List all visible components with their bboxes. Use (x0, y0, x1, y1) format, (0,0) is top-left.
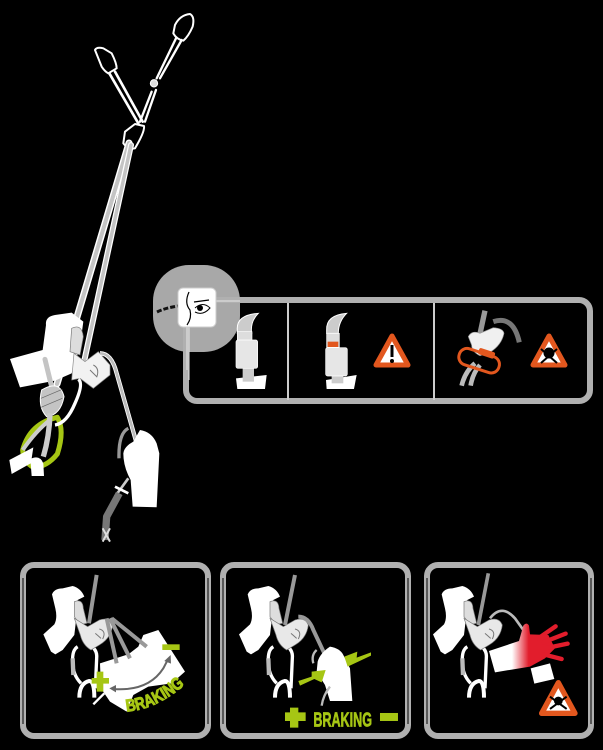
rope tail (43, 413, 50, 457)
hand positions (100, 630, 185, 712)
brake rope (100, 353, 137, 443)
icon: warning triangle (376, 336, 408, 365)
rope up (478, 311, 485, 342)
white carabiner (55, 379, 81, 425)
orange carabiner (457, 346, 502, 375)
rope strands down (462, 363, 480, 386)
divider 1 (287, 303, 289, 400)
gate sleeve (478, 348, 496, 359)
carabiner right (173, 14, 193, 41)
knot (40, 386, 64, 417)
right hand (123, 430, 159, 507)
eye icon (178, 288, 216, 327)
gripping hand (317, 647, 352, 701)
rope loop and tail (313, 650, 330, 706)
frame (186, 300, 590, 401)
green carabiner (23, 417, 61, 467)
hand cuff (531, 663, 554, 684)
climber belay scene (9, 313, 159, 542)
icon: danger triangle (533, 336, 565, 365)
rope stub (93, 693, 104, 704)
grey rope loop (119, 428, 128, 458)
ok rope sleeve (236, 313, 267, 389)
anchor: carabiners and slings (95, 14, 193, 149)
belay device (72, 352, 110, 388)
plus (92, 672, 109, 692)
icon: danger triangle (542, 683, 575, 713)
panel: braking hand motion (20, 562, 211, 739)
panel: hand position braking (223, 565, 408, 736)
label: BRAKING (313, 710, 372, 732)
plus sign (285, 708, 306, 728)
carabiner lower (123, 124, 144, 149)
sight line (157, 306, 178, 312)
worn rope sleeve (326, 313, 357, 389)
fist shading (70, 327, 83, 355)
device body (468, 328, 504, 356)
rope end (115, 478, 128, 497)
panel: braking hand motion: BRAKING (125, 677, 184, 712)
carabiner left (95, 48, 117, 73)
device and hand (433, 586, 502, 698)
arrow heads (109, 655, 171, 692)
lower arm (9, 447, 44, 476)
inspection magnifier (153, 265, 240, 352)
ropes (285, 575, 327, 658)
minus sign (380, 713, 398, 721)
misuse device with orange carabiner (457, 311, 519, 386)
ropes (478, 573, 488, 625)
device and hand (239, 586, 308, 698)
left hand (10, 313, 83, 387)
panel: hand danger (427, 565, 591, 736)
curved label (127, 682, 188, 712)
rope fans (89, 575, 147, 663)
device and hand (43, 586, 113, 698)
main rope strands (57, 143, 131, 384)
divider 2 (433, 303, 435, 400)
grey rope rear (493, 320, 519, 342)
arrow arc (113, 660, 168, 689)
rope through hand (45, 359, 52, 387)
forbidden open hand (489, 624, 568, 672)
minus (162, 644, 180, 650)
squeeze arrows (298, 652, 371, 686)
skull (541, 348, 557, 363)
panel: rope inspection (157, 288, 590, 401)
slings (109, 72, 143, 123)
